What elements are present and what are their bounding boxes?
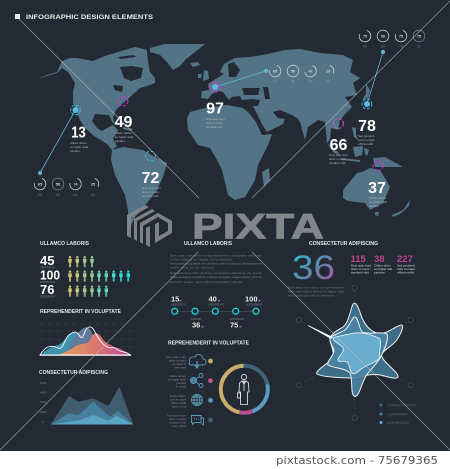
timeline: 40	[208, 294, 217, 304]
icon list text: sunt in culpa	[170, 398, 186, 402]
paragraph centre: Duis aute irure dolor in reprehenderit in voluptate velit esse	[170, 254, 262, 258]
mini gauges: centre map: 66	[291, 80, 295, 84]
callout 72	[142, 170, 161, 198]
callout 72: 72	[142, 170, 160, 187]
radar legend: ADIPISCING	[387, 421, 409, 425]
stats row	[350, 254, 415, 274]
mini gauges: upper right: 33	[363, 44, 367, 48]
callout 78: officia mollit	[358, 142, 373, 146]
timeline: DESERUNT	[208, 302, 225, 306]
icon list text: Duis aute ir ure	[166, 355, 186, 359]
callout 66	[329, 137, 348, 165]
world map	[37, 44, 410, 232]
stats row: pariatur	[374, 270, 386, 274]
callout 13: 13	[71, 124, 86, 142]
mini gauges: lower left: 74	[74, 182, 78, 186]
callout 37: eu fugiat nulla	[369, 200, 387, 204]
callout 97: dolor in repre	[206, 121, 223, 125]
callout 13: Cillum dolore	[70, 141, 87, 145]
paragraph centre: sint occaecat cupidatat non proident, sunt in culpa qui officia deserunt	[170, 262, 262, 266]
stats row: 227	[397, 254, 413, 265]
callout 66: 66	[330, 137, 348, 154]
callout 37: 37	[368, 180, 386, 197]
stats row: Cillum dolor	[374, 264, 392, 268]
radar legend	[380, 404, 416, 425]
mini gauges: centre map: 31	[273, 80, 277, 84]
big number 36: 36	[292, 249, 335, 287]
mini gauges: centre map: 47	[308, 70, 312, 74]
icon list text: anim id est	[172, 404, 186, 408]
mini gauges: lower left: 58	[56, 182, 60, 186]
icon list text: dolor in repre	[169, 358, 186, 362]
layered area chart: 3000	[40, 400, 47, 404]
stats row: henderit velit	[351, 270, 369, 274]
paragraph right: sint culpa qui officia deserunt	[288, 294, 334, 298]
mini gauges: upper right: 99	[381, 44, 385, 48]
map holes: inland seas	[113, 55, 270, 99]
footer bar	[0, 451, 450, 469]
icon list text: Duis aute irure	[167, 414, 186, 418]
callout 78	[358, 118, 376, 146]
mini gauges: upper right: 75	[399, 34, 403, 38]
radar legend: CONSECTETUR	[387, 404, 416, 408]
mini gauges: centre map: 59	[326, 80, 330, 84]
section heading: reprehenderit centre: REPREHENDERIT IN VOLUPTATE	[168, 340, 249, 346]
donut chart	[221, 366, 268, 413]
mini gauges: upper right	[358, 29, 425, 48]
callout 66: Duis aute irure	[329, 153, 348, 157]
callout 37: pariatur	[369, 204, 379, 208]
icon list text: esse cillum	[172, 424, 187, 428]
section heading: consectetur right: CONSECTETUR ADIPISCING	[309, 241, 378, 247]
callout 49: 49	[115, 114, 132, 131]
radar legend: CUPIDATAT	[387, 412, 408, 416]
callout 13: pariatur	[70, 149, 80, 153]
mountain area chart	[40, 324, 133, 355]
icon list text: Cillum dolore	[169, 374, 186, 378]
callout 37: Cillum dolore	[369, 196, 386, 200]
timeline: 36	[192, 320, 200, 330]
paragraph centre: ad minim veniam, quis nostrud exercitation ullamco	[170, 280, 242, 284]
layered area chart: 2000	[40, 410, 47, 414]
mini gauges: lower left: 65	[38, 182, 42, 186]
icon: network	[190, 374, 203, 388]
icon: cloud	[189, 355, 206, 368]
mini gauges: upper right: 75	[417, 34, 421, 38]
pictogram stats	[40, 253, 130, 298]
section heading: reprehenderit left: REPREHENDERIT IN VOLUPTATE	[40, 309, 121, 315]
timeline	[171, 294, 263, 330]
marker: 49	[118, 96, 128, 106]
callout 97	[206, 100, 225, 129]
mini gauges: upper right: 50	[381, 34, 385, 38]
layered area chart: 5000	[40, 381, 47, 385]
icon list text: eu fugiat nulla	[168, 378, 186, 382]
section heading: ullamco laboris left: ULLAMCO LABORIS	[40, 241, 89, 247]
section heading: consectetur left: CONSECTETUR ADIPISCING	[39, 370, 108, 376]
icon list text: Sed proident	[170, 394, 186, 398]
paragraph centre	[170, 254, 263, 284]
icon list text: pariatur	[176, 381, 186, 385]
mini gauges: lower left	[33, 177, 100, 197]
pictogram stats: 100	[40, 268, 60, 282]
callout 72: dolor in repre	[142, 190, 159, 194]
icon list text: in culpa	[176, 384, 186, 388]
icon list text: velit esse	[174, 366, 186, 370]
watermark logo mark	[127, 205, 172, 247]
callout 49: Cillum dolore	[115, 131, 132, 135]
callout 97: Duis aute irure	[206, 117, 225, 121]
mini gauges: centre map	[268, 64, 335, 84]
stats row: Sed proident	[397, 264, 415, 268]
layered area chart: 0	[42, 420, 44, 424]
marker: 97	[210, 82, 220, 92]
legend dots	[208, 359, 213, 422]
marker: 13	[71, 105, 80, 115]
timeline: 75	[230, 320, 238, 330]
paragraph right	[288, 286, 344, 298]
callout 37	[368, 180, 387, 208]
section heading: ullamco laboris centre: ULLAMCO LABORIS	[184, 241, 232, 247]
layered area chart: 4000	[40, 390, 47, 394]
footer credit: pixtastock.com - 75679365	[276, 454, 438, 467]
radar chart	[296, 285, 413, 421]
paragraph right: velit esse cillum dolore eu fugiat nulla	[288, 290, 344, 294]
callout 13	[70, 124, 88, 153]
paragraph centre: cillum dolore eu fugiat nulla pariatur	[170, 258, 232, 262]
icon: businessman	[238, 374, 249, 404]
callout 13: eu fugiat nulla	[70, 145, 88, 149]
timeline: DOLOR	[191, 317, 201, 321]
callout 72: Duis aute irure	[142, 186, 161, 190]
icon list text: henderit in	[172, 362, 186, 366]
callout 49	[115, 114, 133, 143]
stats row: officia mollit	[397, 270, 414, 274]
timeline: 15	[171, 294, 179, 304]
callout 97: 97	[206, 100, 224, 118]
stats row: 115	[350, 254, 367, 265]
stats row: Duis aute irure	[351, 264, 372, 268]
watermark text: PIXTA	[192, 208, 324, 246]
pictogram stats: 45	[40, 253, 54, 268]
marker: 72	[146, 151, 155, 161]
icon list text: henderit velit	[170, 420, 186, 424]
paragraph centre: Duis aute irure dolor sit amet, consectetur adipiscing elit, sed do	[170, 271, 262, 275]
callout 72: henderit velit	[142, 194, 159, 198]
marker: 66	[334, 119, 343, 128]
pictogram stats: DESERUNT	[40, 294, 56, 298]
mini gauges: lower left: 65	[73, 193, 78, 197]
mini gauges: lower left: 51	[91, 193, 95, 197]
mini gauges: upper right: 75	[363, 34, 367, 38]
location marker lines	[38, 50, 385, 175]
callout 49: eu fugiat nulla	[115, 135, 133, 139]
mini gauges: lower left: 25	[91, 182, 95, 186]
mini gauges: centre map: 25	[308, 80, 313, 84]
stats row: sunt in culpa	[397, 267, 415, 271]
title: INFOGRAPHIC DESIGN ELEMENTS	[26, 14, 154, 21]
timeline: VERITATIS	[171, 302, 186, 306]
mini gauges: lower left: 92	[56, 193, 60, 197]
callout 78: Sed proident	[358, 134, 375, 138]
stats row: dolor in repre	[351, 267, 370, 271]
mini gauges: upper right: 75	[399, 44, 403, 48]
icon list text	[166, 355, 187, 428]
layered area chart	[40, 381, 133, 424]
mini gauges: centre map: 50	[291, 70, 295, 74]
mini gauges: centre map: 19	[326, 70, 330, 74]
mini gauges: upper right: 50	[417, 44, 421, 48]
marker: 37	[373, 161, 383, 171]
icon list text: dolor in repre	[169, 417, 186, 421]
stats row: 38	[374, 254, 385, 265]
callout 66: dolor in repre	[329, 157, 346, 161]
paragraph centre: mollit anim id est laborum	[170, 266, 215, 270]
icon: chat	[192, 416, 204, 425]
pictogram stats: CUPIDATAT	[40, 280, 56, 284]
callout 78: 78	[358, 118, 376, 135]
icon list text: officia mollit	[171, 401, 186, 405]
mini gauges: lower left: 23	[38, 193, 42, 197]
callout 66: henderit velit	[329, 161, 346, 165]
callout 78: sunt in culpa	[358, 138, 375, 142]
paragraph centre: eiusmod tempor incididunt ut labore et dolore magna aliqua. Ut enim	[170, 275, 263, 279]
timeline: INCIDIDUNT	[246, 302, 263, 306]
timeline: 100	[245, 294, 258, 304]
timeline: CUPIDATAT	[229, 317, 245, 321]
callout 49: pariatur	[115, 139, 125, 143]
pictogram stats: 76	[40, 282, 54, 297]
marker: 78	[362, 99, 372, 109]
icon: globe	[192, 394, 202, 406]
callout 97: henderit velit	[206, 125, 223, 129]
mini gauges: centre map: 65	[273, 70, 277, 74]
pictogram stats: VERITATIS	[40, 266, 55, 270]
stats row: eu fugiat null	[374, 267, 392, 271]
paragraph right: Duis aute irure dolor in reprehenderit	[288, 286, 344, 290]
